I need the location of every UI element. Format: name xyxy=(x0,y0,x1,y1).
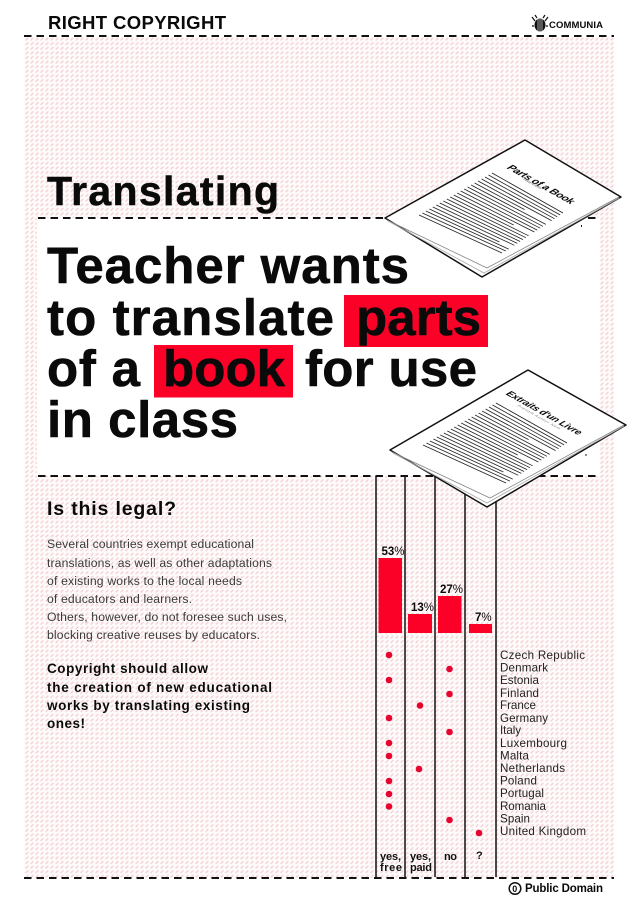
highlight: parts xyxy=(344,295,488,347)
license: public domain: Public Domain xyxy=(525,883,603,895)
illustration: English book page xyxy=(385,140,621,277)
logo: Communia: COMMUNIA xyxy=(549,20,603,31)
country list: Malta xyxy=(500,750,530,762)
body text: Others, however, do not foresee such uses, xyxy=(47,610,287,624)
country list xyxy=(500,649,586,838)
bar chart: 53% xyxy=(382,546,405,558)
bar chart xyxy=(378,546,492,633)
country list: Poland xyxy=(500,774,537,788)
main question heading: to translate xyxy=(47,289,334,346)
country list: Romania xyxy=(500,800,547,813)
call to action xyxy=(46,661,272,731)
logo: Communia xyxy=(532,15,603,32)
column labels: yes, xyxy=(380,851,401,863)
country list: United Kingdom xyxy=(500,825,586,838)
dot matrix: yes, free xyxy=(386,652,392,810)
text lines xyxy=(419,173,563,253)
illustration: French book page xyxy=(390,370,626,507)
book title: Parts of a Book xyxy=(503,164,578,206)
column rules of the chart xyxy=(376,476,496,877)
column labels: yes, xyxy=(410,851,431,863)
body text xyxy=(47,537,287,642)
body text: of existing works to the local needs xyxy=(47,574,242,588)
white question panel xyxy=(37,218,600,476)
bar chart: 13% xyxy=(411,602,434,614)
column labels: no xyxy=(444,851,457,863)
country list: Portugal xyxy=(500,787,544,800)
bar chart: 7% xyxy=(475,612,492,624)
category heading: Translating xyxy=(47,168,279,214)
country list: Denmark xyxy=(500,662,548,674)
call to action: works by translating existing xyxy=(46,698,250,713)
header: series title: RIGHT COPYRIGHT xyxy=(48,12,227,33)
main question heading: Teacher wants xyxy=(47,237,409,294)
body text: blocking creative reuses by educators. xyxy=(47,628,260,642)
bottom dashed rule xyxy=(24,877,614,879)
book author: Firstname Author xyxy=(522,178,544,190)
call to action: the creation of new educational xyxy=(47,680,272,695)
bar chart: 27% xyxy=(440,584,463,596)
book title: Extraits d'un Livre xyxy=(502,390,585,437)
column labels: ? xyxy=(476,850,483,862)
call to action: ones! xyxy=(47,716,85,731)
main question heading: parts xyxy=(356,289,481,346)
column labels: free xyxy=(380,862,402,874)
main question heading: for use xyxy=(305,340,477,397)
main question heading: book xyxy=(163,340,286,397)
country list: Luxembourg xyxy=(500,737,567,750)
column labels xyxy=(380,850,483,874)
upper dashed rule xyxy=(38,217,600,219)
country list: Estonia xyxy=(500,674,540,687)
main question heading: of a xyxy=(47,340,141,397)
country list: France xyxy=(500,699,536,712)
body text: of educators and learners. xyxy=(47,592,192,606)
call to action: Copyright should allow xyxy=(47,661,208,676)
dot matrix: unknown xyxy=(476,830,482,836)
main question heading: in class xyxy=(47,391,238,448)
corner ticks xyxy=(580,225,582,227)
corner ticks xyxy=(585,454,587,456)
dot matrix: no xyxy=(446,666,453,823)
country list: Netherlands xyxy=(500,762,565,775)
license: public domain: 0 xyxy=(512,884,517,894)
text lines xyxy=(423,403,567,483)
main question heading xyxy=(47,237,488,448)
top dashed rule xyxy=(24,35,614,37)
lower dashed rule xyxy=(38,475,600,477)
country list: Italy xyxy=(500,724,521,737)
body text: translations, as well as other adaptations xyxy=(47,556,272,570)
country list: Spain xyxy=(500,812,530,826)
column labels: paid xyxy=(410,862,432,874)
highlight: book xyxy=(154,345,293,398)
body text: Several countries exempt educational xyxy=(47,537,254,551)
country list: Germany xyxy=(500,712,548,725)
subheading: Is this legal? xyxy=(47,498,176,520)
dot matrix: yes, paid xyxy=(416,702,423,772)
book author: Prénom Auteur Nom xyxy=(516,404,563,430)
country list: Finland xyxy=(500,687,539,700)
country list: Czech Republic xyxy=(500,649,585,662)
